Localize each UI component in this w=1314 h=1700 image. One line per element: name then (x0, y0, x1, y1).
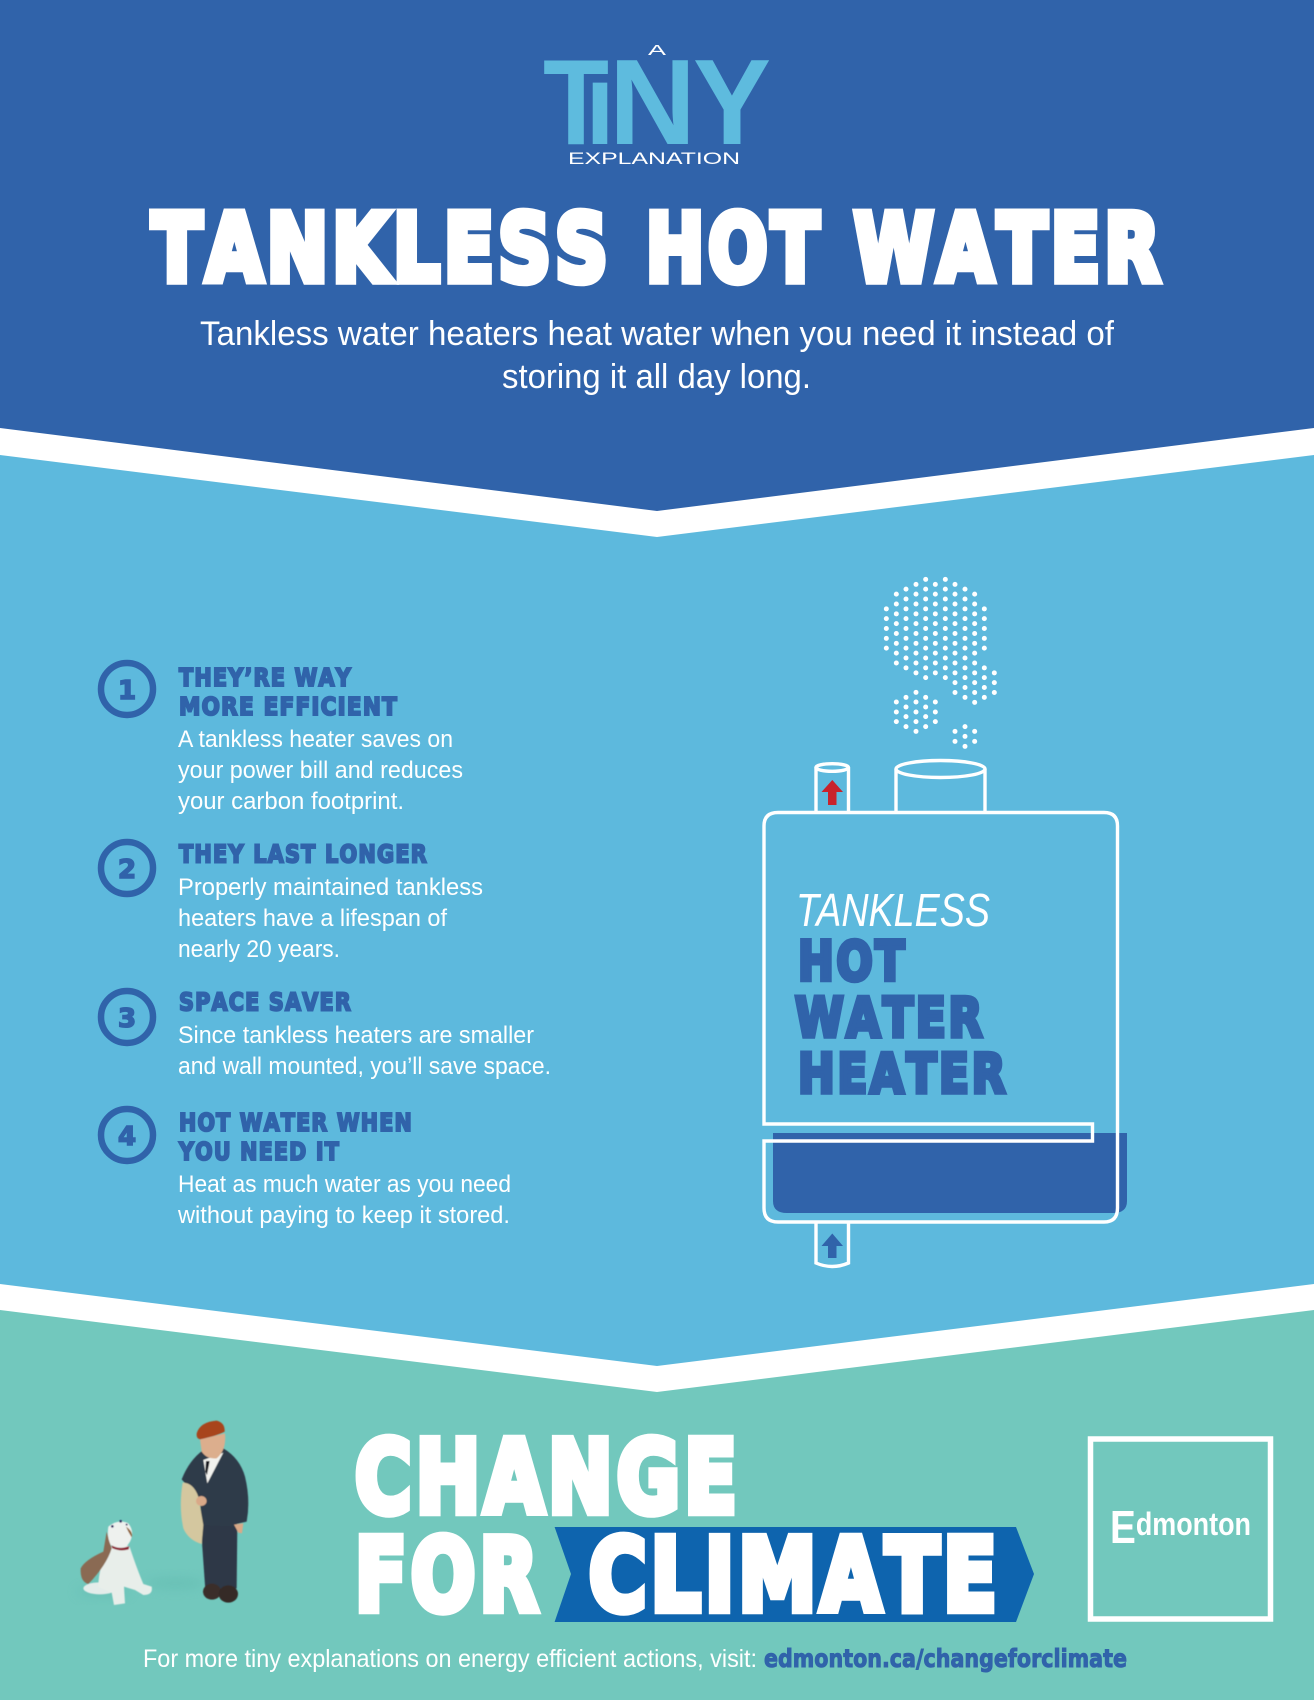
title (152, 194, 1164, 302)
benefit 1: more efficient: A tankless heater saves on (178, 726, 453, 753)
divider: upper white chevron (0, 0, 1314, 537)
exhaust pipe (896, 760, 985, 812)
benefit 1: more efficient: THEY’RE WAY (179, 663, 352, 692)
water fill (773, 1133, 1127, 1213)
campaign wordmark: change for climate (355, 1421, 1034, 1634)
benefit 4: hot water on demand: Heat as much water as you need (178, 1171, 511, 1198)
logo: a tiny explanation: Y (693, 34, 771, 170)
campaign wordmark: change for climate: CHANGE (355, 1421, 741, 1536)
heater label: HEATER (798, 1042, 1008, 1106)
cold inlet pipe (816, 1222, 848, 1266)
logo: a tiny explanation: N (609, 34, 696, 170)
shadows (77, 1578, 205, 1596)
subtitle: Tankless water heaters heat water when you need it instead of (200, 315, 1115, 353)
benefit 3: space saver: SPACE SAVER (179, 988, 352, 1016)
benefit 2: last longer: 2 (118, 855, 136, 885)
benefit 2: last longer: THEY LAST LONGER (179, 840, 428, 868)
arrow: hot water out (822, 780, 843, 805)
benefit 4: hot water on demand (101, 1108, 511, 1229)
logo: a tiny explanation (543, 34, 771, 170)
logo: a tiny explanation: EXPLANATION (568, 150, 740, 168)
footer call to action: For more tiny explanations on energy efficient actions, visit: (143, 1645, 757, 1673)
heater label (795, 884, 1008, 1106)
benefit 2: last longer: heaters have a lifespan of (178, 905, 447, 932)
hot outlet pipe (816, 764, 848, 812)
logo: city of edmonton (1090, 1439, 1270, 1619)
title: WATER (854, 194, 1164, 302)
benefit 3: space saver: 3 (118, 1004, 136, 1034)
icon: steam dots (884, 577, 997, 749)
benefit 4: hot water on demand: YOU NEED IT (178, 1137, 340, 1166)
benefit 2: last longer: Properly maintained tankless (178, 874, 483, 901)
heater label: WATER (795, 986, 985, 1050)
man (181, 1421, 248, 1603)
title: HOT (646, 194, 823, 302)
footer call to action: edmonton.ca/changeforclimate (764, 1644, 1127, 1673)
subtitle: storing it all day long. (502, 358, 811, 396)
heater label: TANKLESS (796, 884, 990, 936)
climate banner (555, 1527, 1034, 1622)
figurines: man and dog (77, 1421, 248, 1605)
benefit list (101, 663, 551, 1229)
dog (81, 1520, 152, 1605)
benefit 4: hot water on demand: 4 (118, 1122, 136, 1152)
benefit 4: hot water on demand: without paying to keep it stored. (177, 1202, 510, 1229)
panel: header background (0, 0, 1314, 511)
logo: city of edmonton: dmonton (1136, 1506, 1251, 1542)
footer call to action (143, 1644, 1127, 1673)
benefit 3: space saver: and wall mounted, you’ll save space. (178, 1053, 551, 1080)
benefit 4: hot water on demand: HOT WATER WHEN (179, 1108, 413, 1137)
campaign wordmark: change for climate: CLIMATE (589, 1519, 1001, 1634)
benefit 3: space saver: Since tankless heaters are smaller (178, 1022, 534, 1049)
benefit 1: more efficient: 1 (118, 676, 136, 706)
heater label: HOT (798, 929, 907, 993)
benefit 1: more efficient: MORE EFFICIENT (179, 692, 398, 721)
title: TANKLESS (152, 194, 612, 302)
benefit 2: last longer: nearly 20 years. (178, 936, 340, 963)
logo: a tiny explanation: A (648, 42, 666, 59)
campaign wordmark: change for climate: FOR (355, 1519, 542, 1634)
logo: city of edmonton: E (1110, 1501, 1136, 1553)
benefit 2: last longer (101, 840, 483, 963)
logo: a tiny explanation: I (586, 63, 614, 163)
diagram: tankless water heater (764, 760, 1127, 1266)
benefit 1: more efficient: your carbon footprint. (178, 788, 404, 815)
arrow: cold water in (822, 1234, 843, 1258)
benefit 1: more efficient: your power bill and reduces (178, 757, 463, 784)
heater outline (764, 812, 1118, 1222)
benefit 1: more efficient (101, 663, 463, 815)
benefit 3: space saver (101, 988, 551, 1080)
subtitle (200, 315, 1115, 396)
logo: a tiny explanation: T (543, 34, 609, 170)
